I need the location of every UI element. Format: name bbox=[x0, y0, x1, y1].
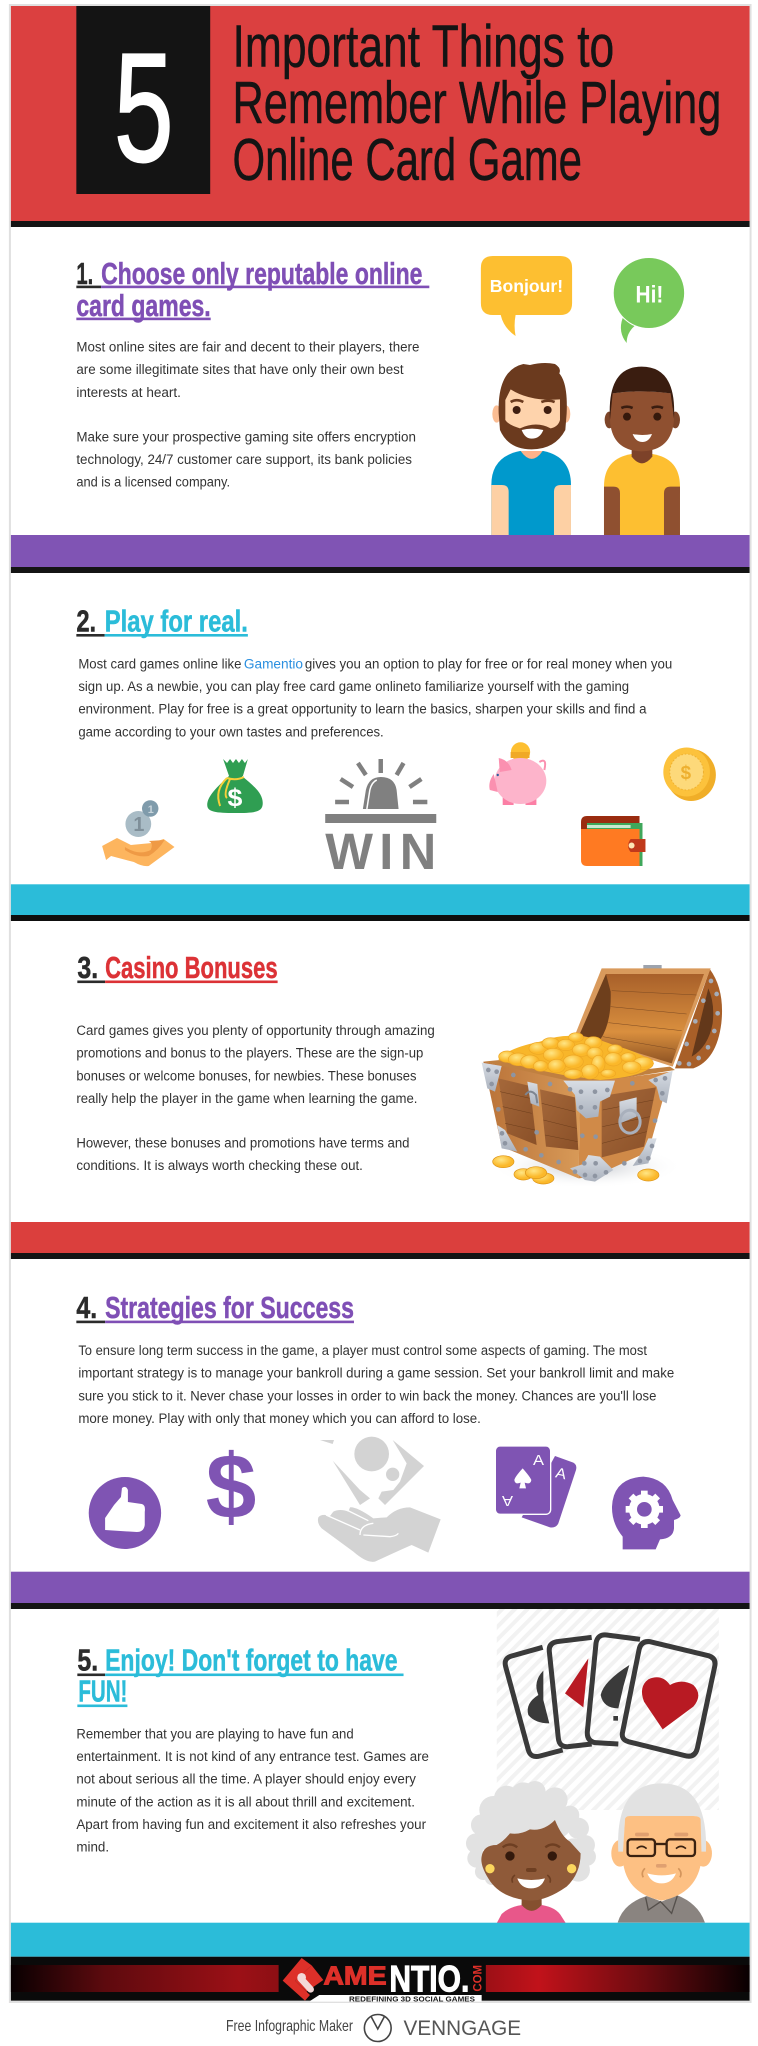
striped backdrop bbox=[497, 1609, 719, 1810]
title: Important Things to bbox=[233, 14, 614, 80]
illustration: treasure chest bbox=[482, 965, 722, 1188]
body text 1: technology, 24/7 customer care support, its bank policies bbox=[76, 452, 412, 467]
body text 3: bonuses or welcome bonuses, for newbies. These bonuses bbox=[76, 1068, 417, 1083]
body text 5: Apart from having fun and excitement it also refreshes your bbox=[76, 1817, 427, 1832]
illustration: fan of cards bbox=[505, 1635, 715, 1757]
panel: section 1 reputable games bbox=[11, 256, 750, 573]
icon: money bag bbox=[207, 759, 263, 813]
body text 5: not about serious all the time. A player should enjoy every bbox=[76, 1772, 416, 1787]
heading 3: Casino Bonuses bbox=[105, 950, 278, 985]
icon: hand with coins: 1 bbox=[148, 804, 154, 816]
heading 3: 3. bbox=[77, 950, 98, 985]
body text 3 bbox=[76, 1023, 435, 1173]
body text 2 bbox=[78, 656, 672, 739]
heading 2: 2. bbox=[76, 603, 96, 639]
panel: section 3 casino bonuses bbox=[11, 950, 750, 1259]
chest iron corners bbox=[482, 1063, 673, 1182]
speech bubble: Hi: Hi! bbox=[636, 281, 663, 309]
body text 2: gives you an option to play for free or for real money when you bbox=[305, 656, 672, 671]
body text 4: more money. Play with only that money which you can afford to lose. bbox=[78, 1411, 481, 1426]
speech bubble: Bonjour: Bonjour! bbox=[490, 276, 563, 296]
icon: siren with WIN bbox=[325, 759, 436, 880]
body text 5: entertainment. It is not kind of any entrance test. Games are bbox=[76, 1749, 429, 1764]
credit: Venngage bbox=[226, 2014, 521, 2042]
heading 2: Play for real. bbox=[105, 603, 248, 639]
heading 1 bbox=[76, 256, 429, 323]
icon: hand with coins: 1 bbox=[133, 814, 144, 836]
body text 5 bbox=[76, 1726, 429, 1855]
icon: playing cards: A bbox=[502, 1492, 513, 1508]
logo: Gamentio: AME bbox=[323, 1961, 387, 1991]
panel: section 2 play for real bbox=[11, 603, 750, 921]
panel: header bbox=[11, 6, 750, 227]
body text 3: really help the player in the game when learning the game. bbox=[76, 1091, 417, 1106]
heading 3 bbox=[77, 950, 278, 985]
credit: Venngage: Free Infographic Maker bbox=[226, 2018, 354, 2035]
heading 4: 4. bbox=[76, 1290, 97, 1325]
body text 4: important strategy is to manage your bankroll during a game session. Set your bankroll limit and make bbox=[78, 1366, 674, 1381]
icon: wallet bbox=[581, 816, 645, 866]
icon: money bag: $ bbox=[228, 784, 243, 812]
speech bubble: Hi bbox=[614, 258, 684, 343]
logo: Gamentio: NTIO. bbox=[389, 1959, 469, 2000]
illustration: bearded man bbox=[491, 363, 571, 536]
body text 1: Make sure your prospective gaming site offers encryption bbox=[76, 429, 416, 444]
illustration: smiling man bbox=[604, 367, 680, 536]
body text 4: To ensure long term success in the game, a player must control some aspects of gaming. The most bbox=[78, 1343, 647, 1358]
icon: gold coin: $ bbox=[681, 763, 692, 784]
heading 1: 1. bbox=[76, 256, 93, 291]
body text 5: minute of the action as it is all about thrill and excitement. bbox=[76, 1794, 415, 1809]
body text 5: mind. bbox=[76, 1840, 109, 1855]
body text 1: Most online sites are fair and decent to their players, there bbox=[76, 339, 419, 355]
heading 5 bbox=[77, 1642, 404, 1709]
number badge bbox=[76, 6, 210, 194]
body text 2: game according to your own tastes and preferences. bbox=[78, 724, 384, 739]
number badge: 5 bbox=[114, 20, 174, 194]
logo: Gamentio bbox=[283, 1958, 484, 2003]
icon: piggy bank bbox=[489, 742, 546, 805]
panel: section 5 enjoy bbox=[11, 1609, 750, 1957]
icon: hand with coins bbox=[102, 800, 175, 866]
heading 1: card games. bbox=[76, 288, 211, 323]
title: Online Card Game bbox=[233, 128, 582, 193]
heading 2 bbox=[76, 603, 248, 639]
illustration: elderly woman bbox=[466, 1781, 596, 1923]
body text 2: Most card games online like bbox=[78, 656, 241, 671]
coin pile bbox=[498, 1033, 654, 1080]
icon: siren with WIN: WIN bbox=[325, 823, 436, 880]
body text 4 bbox=[78, 1343, 674, 1426]
heading 1: Choose only reputable online bbox=[101, 256, 422, 291]
title bbox=[233, 14, 721, 193]
icon: thumbs up bbox=[89, 1477, 161, 1549]
body text 1: and is a licensed company. bbox=[76, 475, 230, 490]
body text 2: sign up. As a newbie, you can play free card game onlineto familiarize yourself with the gaming bbox=[78, 679, 629, 694]
heading 5: 5. bbox=[77, 1642, 98, 1678]
panel: footer logo band bbox=[11, 1957, 750, 2003]
loose coins bbox=[493, 1156, 659, 1184]
body text 4: sure you stick to it. Never chase your losses in order to win back the money. Chances are you'll lose bbox=[78, 1388, 656, 1403]
credit: Venngage: VENNGAGE bbox=[404, 2016, 521, 2040]
body text 1: interests at heart. bbox=[76, 385, 181, 400]
speech bubble: Bonjour bbox=[481, 256, 572, 336]
heading 5: Enjoy! Don't forget to have bbox=[105, 1642, 398, 1678]
panel: section 4 strategies bbox=[11, 1290, 750, 1609]
icon: playing cards: A bbox=[554, 1465, 568, 1483]
logo: Gamentio: REDEFINING 3D SOCIAL GAMES bbox=[349, 1996, 475, 2003]
body text 3: conditions. It is always worth checking these out. bbox=[76, 1158, 363, 1173]
body text 1 bbox=[76, 339, 419, 490]
logo: Gamentio: COM bbox=[470, 1965, 484, 1992]
icon: gold coin bbox=[663, 748, 716, 801]
heading 5: FUN! bbox=[78, 1673, 127, 1709]
illustration: elderly man bbox=[611, 1783, 712, 1923]
icon: dollar sign: $ bbox=[206, 1436, 256, 1538]
body text 3: promotions and bonus to the players. These are the sign-up bbox=[76, 1046, 423, 1061]
body text 2: Gamentio bbox=[244, 656, 303, 671]
icon: head with gear bbox=[612, 1477, 681, 1549]
heading 4 bbox=[76, 1290, 354, 1325]
body text 1: are some illegitimate sites that have only their own best bbox=[76, 362, 404, 377]
icon: playing cards: A bbox=[533, 1453, 544, 1469]
icon: playing cards bbox=[495, 1446, 576, 1527]
body text 3: Card games gives you plenty of opportunity through amazing bbox=[76, 1023, 435, 1038]
body text 5: Remember that you are playing to have fun and bbox=[76, 1726, 354, 1741]
body text 2: environment. Play for free is a great opportunity to learn the basics, sharpen your skills and find a bbox=[78, 702, 647, 717]
heading 4: Strategies for Success bbox=[105, 1290, 354, 1325]
icon: hand with banknote bbox=[318, 1437, 441, 1562]
body text 3: However, these bonuses and promotions have terms and bbox=[76, 1135, 409, 1150]
